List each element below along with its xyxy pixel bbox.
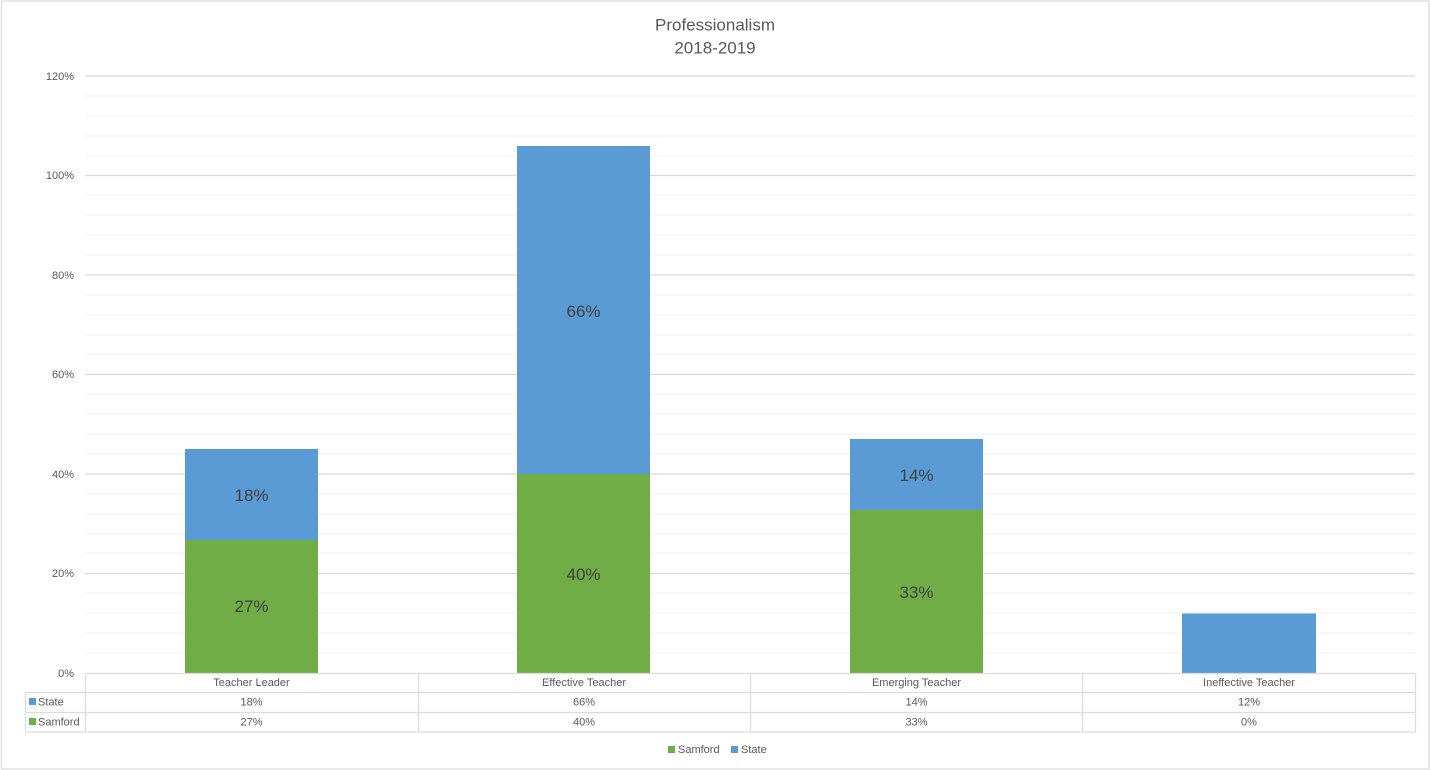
data table: 0% (1241, 716, 1257, 728)
data table: 40% (573, 716, 595, 728)
data table (26, 674, 1416, 732)
data table: 66% (573, 696, 595, 708)
y axis labels (46, 71, 74, 680)
data table: Emerging Teacher (872, 677, 961, 689)
data table: 18% (240, 696, 263, 708)
data table: Effective Teacher (542, 677, 626, 689)
data table: Ineffective Teacher (1203, 677, 1295, 689)
y axis labels: 20% (52, 568, 74, 580)
data table: 33% (905, 716, 928, 728)
bar: Emerging Teacher: 33% (899, 583, 934, 602)
data table: Teacher Leader (213, 677, 290, 689)
bar: Ineffective Teacher (1182, 614, 1316, 673)
bar: Teacher Leader (185, 449, 318, 673)
bar: Teacher Leader: 18% (234, 486, 269, 505)
bar: Effective Teacher: 40% (566, 565, 601, 584)
y axis labels: 100% (46, 170, 74, 182)
y axis labels: 80% (52, 270, 74, 282)
title: Professionalism (655, 16, 775, 34)
y axis labels: 60% (52, 369, 74, 381)
y axis labels: 120% (46, 71, 74, 83)
data table: 27% (240, 716, 263, 728)
bar: Teacher Leader: 27% (234, 597, 269, 616)
data table: 14% (905, 696, 928, 708)
legend: Samford (678, 744, 720, 756)
y axis labels: 40% (52, 469, 74, 481)
bar: Emerging Teacher: 14% (899, 466, 934, 485)
data table: State (38, 696, 64, 708)
legend (668, 744, 767, 756)
bar: Effective Teacher: 66% (566, 302, 601, 321)
y axis labels: 0% (58, 668, 74, 680)
title (655, 16, 775, 58)
title: 2018-2019 (674, 38, 756, 58)
legend: State (741, 744, 767, 756)
data table: 12% (1238, 696, 1260, 708)
bar: Effective Teacher (517, 146, 650, 673)
bar: Emerging Teacher (850, 439, 983, 673)
data table: Samford (38, 716, 80, 728)
